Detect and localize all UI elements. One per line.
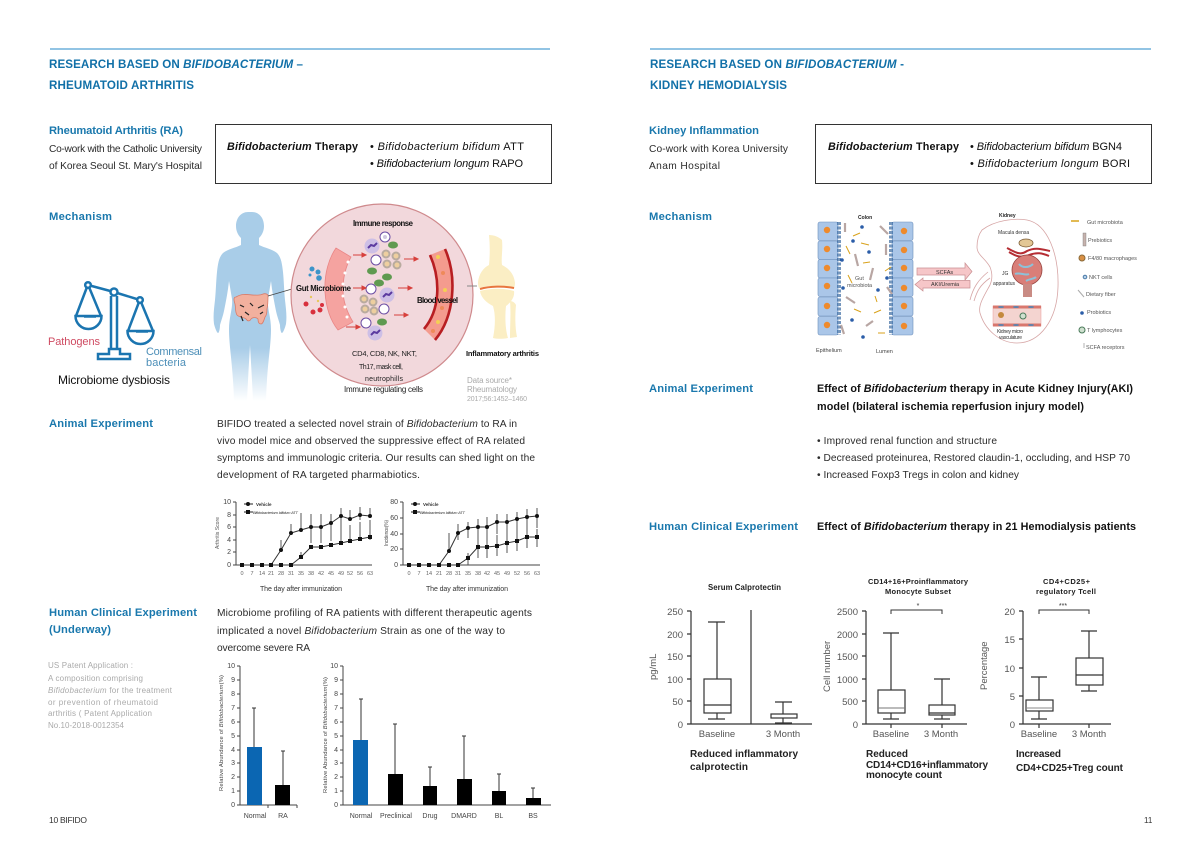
bar chart: therapeutic agents: 3 <box>334 760 338 767</box>
text block: RA collaboration: of Korea Seoul St. Mary's Hospital <box>49 161 202 172</box>
bar chart: therapeutic agents: 9 <box>334 677 338 684</box>
bar chart: therapeutic agents: 0 <box>334 802 338 809</box>
label: inflammatory arthritis: Inflammatory arthritis <box>466 349 539 358</box>
heading: human clinical experiment underway: Human Clinical Experiment <box>49 607 197 619</box>
box plot: monocyte subset: 3 Month <box>924 729 958 740</box>
note: patent application: arthritis ( Patent Application <box>48 709 152 718</box>
text block: AKI effect heading: model (bilateral ischemia reperfusion injury model) <box>817 401 1084 413</box>
line chart: incidence: 21 <box>436 571 442 577</box>
line chart: incidence: The day after immunization <box>426 586 508 593</box>
box plot: serum calprotectin: 250 <box>667 607 683 618</box>
diagram: kidney: vasculature <box>999 335 1022 341</box>
bar chart: therapeutic agents: BS <box>528 813 538 820</box>
box plot: monocyte subset: 2500 <box>837 607 858 618</box>
legend: kidney diagram: Gut microbiota <box>1087 220 1124 226</box>
red arrows <box>346 253 418 329</box>
label: reduced calprotectin: calprotectin <box>690 762 748 773</box>
label: pathogens: Pathogens <box>48 336 100 348</box>
bar chart: therapeutic agents <box>323 663 551 820</box>
text block: animal experiment description: development of RA targeted pharmabiotics. <box>217 470 420 481</box>
box plot: regulatory T cell: Percentage <box>979 641 990 690</box>
legend: kidney diagram: NKT cells <box>1089 275 1113 281</box>
box plot: regulatory T cell: 15 <box>1004 635 1015 646</box>
bar chart: normal vs RA: 7 <box>231 705 235 712</box>
panel: kidney hemodialysis page <box>648 49 1153 825</box>
heading: rheumatoid arthritis <box>49 58 304 92</box>
line chart: incidence: 52 <box>514 571 520 577</box>
bar chart: normal vs RA: Normal <box>244 813 267 820</box>
line chart: arthritis score: 56 <box>357 571 363 577</box>
bar chart: normal vs RA: 10 <box>227 663 235 670</box>
immune cells <box>360 232 400 340</box>
list: animal results: • Increased Foxp3 Tregs in colon and kidney <box>817 470 1020 481</box>
note: patent application: or prevention of rheumatoid <box>48 698 158 707</box>
note: data source <box>467 376 527 403</box>
box plot: monocyte subset: * <box>917 603 920 610</box>
heading: rheumatoid arthritis: RESEARCH BASED ON BIFIDOBACTERIUM – <box>49 58 304 71</box>
illustration: gut immune circle: neutrophills <box>365 376 404 383</box>
note: data source: Rheumatology <box>467 385 517 394</box>
box plot: monocyte subset: 500 <box>842 697 858 708</box>
line chart: arthritis score: The day after immunization <box>260 586 342 593</box>
bar chart: therapeutic agents: 2 <box>334 774 338 781</box>
line chart: incidence: 0 <box>394 562 398 569</box>
line chart: incidence: 7 <box>417 571 421 577</box>
label: commensal bacteria: bacteria <box>146 357 187 369</box>
line chart: incidence: 20 <box>390 546 398 553</box>
box plot: serum calprotectin: 50 <box>672 697 683 708</box>
label: reduced monocyte: CD14+CD16+inflammatory <box>866 760 988 771</box>
bar chart: therapeutic agents: BL <box>495 813 503 820</box>
note: patent application: US Patent Application : <box>48 661 133 670</box>
line chart: incidence: 63 <box>534 571 540 577</box>
label: reduced monocyte: Reduced <box>866 749 908 760</box>
legend: kidney diagram: Probiotics <box>1087 310 1111 316</box>
box plot: monocyte subset: 1500 <box>837 652 858 663</box>
line chart: arthritis score: 45 <box>328 571 334 577</box>
heading: mechanism: Mechanism <box>649 211 712 223</box>
line chart: incidence: 28 <box>446 571 452 577</box>
box plot: serum calprotectin <box>648 583 812 740</box>
box plot: monocyte subset: CD14+16+Proinflammatory <box>868 577 969 586</box>
text block: AKI effect heading: Effect of Bifidobacterium therapy in Acute Kidney Injury(AKI) <box>817 383 1133 395</box>
diagram: colon: Gut <box>855 276 864 282</box>
box plot: regulatory T cell: *** <box>1059 603 1067 610</box>
panel: rheumatoid arthritis page <box>48 49 552 825</box>
bar chart: therapeutic agents: 10 <box>330 663 338 670</box>
arrow: SCFAs: SCFAs <box>936 270 953 276</box>
text block: animal experiment description: BIFIDO treated a selected novel strain of Bifidobacterium to RA in <box>217 419 517 430</box>
line chart: arthritis score: 4 <box>227 537 231 544</box>
text block: hemodialysis effect heading: Effect of Bifidobacterium therapy in 21 Hemodialysis patients <box>817 521 1136 533</box>
text block: animal experiment description: vivo model mice and observed the suppressive effect of RA related <box>217 436 525 447</box>
bar chart: normal vs RA: 8 <box>231 691 235 698</box>
box plot: regulatory T cell: 5 <box>1010 692 1015 703</box>
box plot: serum calprotectin: Serum Calprotectin <box>708 583 781 592</box>
box plot: monocyte subset: Cell number <box>822 641 833 692</box>
blood vessel <box>424 249 452 340</box>
illustration: inflamed knee joint <box>467 235 517 339</box>
heading: kidney hemodialysis <box>650 58 904 92</box>
icon: balance scale <box>76 282 154 359</box>
line chart: arthritis score: 38 <box>308 571 314 577</box>
heading: kidney hemodialysis: RESEARCH BASED ON BIFIDOBACTERIUM - <box>650 58 904 71</box>
arrow: AKI/uremia <box>915 278 970 291</box>
box plot: monocyte subset: Baseline <box>873 729 909 740</box>
diagram: kidney: Kidney micro <box>997 329 1023 335</box>
diagram: kidney: Kidney <box>999 213 1016 219</box>
box plot: regulatory T cell: 3 Month <box>1072 729 1106 740</box>
label: reduced calprotectin: Reduced inflammatory <box>690 749 798 760</box>
diagram: kidney: JG <box>1002 271 1008 277</box>
text block: AKI effect heading <box>817 383 1133 413</box>
bar chart: normal vs RA: 3 <box>231 760 235 767</box>
line chart: arthritis score: Bifidobacterium bifidum ATT <box>253 510 299 515</box>
diagram: kidney <box>970 213 1058 343</box>
bar chart: normal vs RA: 9 <box>231 677 235 684</box>
callout: kidney therapy strains: • Bifidobacterium bifidum BGN4 <box>970 141 1122 153</box>
bar chart: therapeutic agents: Normal <box>350 813 373 820</box>
illustration: gut immune circle: Immune response <box>353 219 414 228</box>
note: data source: Data source* <box>467 376 512 385</box>
heading: rheumatoid arthritis: RHEUMATOID ARTHRITIS <box>49 79 194 92</box>
text block: kidney collaboration <box>649 125 789 172</box>
box plot: regulatory T cell: 20 <box>1004 607 1015 618</box>
heading: kidney hemodialysis: KIDNEY HEMODIALYSIS <box>650 79 787 92</box>
box plot: regulatory T cell: regulatory Tcell <box>1036 587 1096 596</box>
illustration: gut immune circle <box>291 204 473 386</box>
text block: RA collaboration <box>49 125 203 172</box>
diagram: kidney: Macula densa <box>998 230 1029 236</box>
line chart: arthritis score: 35 <box>298 571 304 577</box>
line chart: incidence: 40 <box>390 531 398 538</box>
illustration: gut immune circle: Blood vessel <box>417 296 458 305</box>
note: patent application: Bifidobacterium for the treatment <box>48 686 173 695</box>
bar chart: normal vs RA: 2 <box>231 774 235 781</box>
label: commensal bacteria: Commensal <box>146 346 202 358</box>
box plot: regulatory T cell: CD4+CD25+ <box>1043 577 1091 586</box>
line chart: arthritis score <box>215 499 373 593</box>
bar chart: therapeutic agents: 6 <box>334 719 338 726</box>
line chart: arthritis score: 52 <box>347 571 353 577</box>
page number: 10 BIFIDO: 10 BIFIDO <box>49 815 87 825</box>
text block: animal experiment description <box>217 419 535 481</box>
callout: RA therapy strains: Bifidobacterium Therapy <box>227 141 358 153</box>
text block: animal experiment description: symptoms and immunologic criteria. Our results can shed light on the <box>217 453 535 464</box>
box plot: regulatory T cell: 0 <box>1010 720 1015 731</box>
box plot: serum calprotectin: 150 <box>667 652 683 663</box>
line chart: arthritis score: 2 <box>227 549 231 556</box>
box plot: monocyte subset: Monocyte Subset <box>885 587 952 596</box>
diagram: kidney: apparatus <box>993 281 1016 287</box>
label: immune regulating cells: Immune regulating cells <box>344 385 423 394</box>
box plot: serum calprotectin: pg/mL <box>648 654 659 680</box>
heading: mechanism: Mechanism <box>49 211 112 223</box>
text block: RA collaboration: Rheumatoid Arthritis (RA) <box>49 125 183 137</box>
box plot: monocyte subset: 1000 <box>837 675 858 686</box>
callout: RA therapy strains: • Bifidobacterium bifidum ATT <box>370 141 524 153</box>
heading: human clinical experiment underway <box>49 607 197 636</box>
label: increased treg: CD4+CD25+Treg count <box>1016 763 1124 774</box>
text block: RA collaboration: Co-work with the Catholic University <box>49 144 203 155</box>
line chart: arthritis score: 21 <box>268 571 274 577</box>
line chart: incidence: 31 <box>455 571 461 577</box>
microbes <box>308 266 322 281</box>
label: reduced monocyte: monocyte count <box>866 770 943 781</box>
box plot: monocyte subset <box>822 577 969 740</box>
line chart: arthritis score: 6 <box>227 524 231 531</box>
note: data source: 2017;56:1452–1460 <box>467 396 527 403</box>
note: patent application: A composition comprising <box>48 674 143 683</box>
line chart: arthritis score: Vehicle <box>256 502 272 507</box>
bar chart: normal vs RA <box>219 663 297 820</box>
callout: kidney therapy strains: • Bifidobacterium longum BORI <box>970 158 1130 170</box>
callout: RA therapy strains <box>216 124 552 184</box>
page number: 11: 11 <box>1144 816 1153 825</box>
line chart: incidence: 38 <box>475 571 481 577</box>
heading: animal experiment: Animal Experiment <box>649 383 753 395</box>
label: microbiome dysbiosis: Microbiome dysbiosis <box>58 373 170 387</box>
box plot: regulatory T cell <box>979 577 1111 740</box>
bar chart: normal vs RA: 4 <box>231 747 235 754</box>
box plot: regulatory T cell: 10 <box>1004 664 1015 675</box>
text block: human clinical description: Microbiome profiling of RA patients with different therapeutic agents <box>217 608 532 619</box>
bar chart: therapeutic agents: Preclinical <box>380 813 412 820</box>
box plot: serum calprotectin: 100 <box>667 675 683 686</box>
line chart: incidence <box>384 499 540 593</box>
text block: human clinical description <box>217 608 532 654</box>
line chart: arthritis score: 14 <box>259 571 265 577</box>
line chart: arthritis score: 28 <box>278 571 284 577</box>
bar chart: therapeutic agents: 8 <box>334 691 338 698</box>
legend: kidney diagram: F4/80 macrophages <box>1088 256 1137 262</box>
diagram: colon <box>818 215 913 339</box>
line chart: incidence: 60 <box>390 515 398 522</box>
bar chart: normal vs RA: 0 <box>231 802 235 809</box>
note: patent application: No.10-2018-0012354 <box>48 721 125 730</box>
box plot: monocyte subset: 2000 <box>837 630 858 641</box>
illustration: gut immune circle: CD4, CD8, NK, NKT, <box>352 349 417 358</box>
legend: kidney diagram: SCFA receptors <box>1086 345 1125 351</box>
heading: human clinical experiment underway: (Underway) <box>49 624 111 636</box>
legend: kidney diagram: Dietary fiber <box>1086 292 1116 298</box>
line chart: arthritis score: 63 <box>367 571 373 577</box>
line chart: arthritis score: 10 <box>223 499 231 506</box>
label: reduced monocyte <box>866 749 988 781</box>
bar chart: therapeutic agents: 4 <box>334 747 338 754</box>
line chart: arthritis score: 0 <box>227 562 231 569</box>
line chart: incidence: 80 <box>390 499 398 506</box>
box plot: serum calprotectin: 3 Month <box>766 729 800 740</box>
line chart: arthritis score: 49 <box>338 571 344 577</box>
gut epithelium <box>325 248 353 330</box>
box plot: serum calprotectin: Baseline <box>699 729 735 740</box>
legend: kidney diagram <box>816 220 1137 355</box>
box plot: serum calprotectin: 200 <box>667 630 683 641</box>
legend: kidney diagram: T lymphocytes <box>1087 328 1123 334</box>
text block: kidney collaboration: Anam Hospital <box>649 161 720 172</box>
arrow: AKI/uremia: AKI/Uremia <box>931 282 960 288</box>
text block: kidney collaboration: Co-work with Korea University <box>649 144 789 155</box>
legend: kidney diagram: Epithelium <box>816 348 842 354</box>
bar chart: therapeutic agents: 7 <box>334 705 338 712</box>
bar chart: normal vs RA: RA <box>278 813 288 820</box>
note: patent application <box>48 661 173 730</box>
label: reduced calprotectin <box>690 749 798 773</box>
label: commensal bacteria <box>146 346 202 369</box>
line chart: incidence: Vehicle <box>423 502 439 507</box>
line chart: arthritis score: 0 <box>240 571 244 577</box>
line chart: arthritis score: Arthritis Score <box>215 517 221 549</box>
heading: animal experiment: Animal Experiment <box>49 418 153 430</box>
text block: kidney collaboration: Kidney Inflammation <box>649 125 759 137</box>
bar chart: normal vs RA: 5 <box>231 733 235 740</box>
diagram: colon: microbiota <box>847 283 873 289</box>
line chart: incidence: Bifidobacterium bifidum ATT <box>420 510 466 515</box>
bar chart: therapeutic agents: DMARD <box>451 813 477 820</box>
legend: kidney diagram: Lumen <box>876 349 893 355</box>
bar chart: therapeutic agents: 5 <box>334 733 338 740</box>
line chart: arthritis score: 42 <box>318 571 324 577</box>
illustration: gut immune circle: Gut Microbiome <box>296 284 352 293</box>
callout: kidney therapy strains <box>816 124 1152 184</box>
label: increased treg <box>1016 749 1124 774</box>
line chart: incidence: 14 <box>426 571 432 577</box>
bar chart: normal vs RA: 6 <box>231 719 235 726</box>
line chart: incidence: 0 <box>407 571 411 577</box>
bar chart: normal vs RA: Relative Abundance of Bifidobacterium(%) <box>219 675 225 791</box>
bar chart: therapeutic agents: Relative Abundance of Bifidobacterium(%) <box>323 677 329 793</box>
line chart: arthritis score: 8 <box>227 512 231 519</box>
bar chart: therapeutic agents: Drug <box>422 813 438 820</box>
illustration: gut immune circle: Th17, mask cell, <box>359 364 403 371</box>
line chart: incidence: 49 <box>504 571 510 577</box>
text block: human clinical description: implicated a novel Bifidobacterium Strain as one of the way to <box>217 626 505 637</box>
line chart: incidence: Incidence(%) <box>384 520 390 546</box>
text block: human clinical description: overcome severe RA <box>217 643 310 654</box>
arrow: SCFAs <box>917 263 972 280</box>
line chart: incidence: 45 <box>494 571 500 577</box>
legend: kidney diagram: Prebiotics <box>1088 238 1112 244</box>
list: animal results: • Improved renal function and structure <box>817 436 997 447</box>
line chart: arthritis score: 31 <box>288 571 294 577</box>
callout: kidney therapy strains: Bifidobacterium Therapy <box>828 141 959 153</box>
box plot: monocyte subset: 0 <box>853 720 858 731</box>
box plot: regulatory T cell: Baseline <box>1021 729 1057 740</box>
bar chart: normal vs RA: 1 <box>231 788 235 795</box>
bar chart: therapeutic agents: 1 <box>334 788 338 795</box>
heading: human clinical experiment: Human Clinical Experiment <box>649 521 798 533</box>
list: animal results <box>817 436 1130 481</box>
illustration: human body <box>214 212 286 401</box>
line chart: incidence: 42 <box>484 571 490 577</box>
list: animal results: • Decreased proteinurea, Restored claudin-1, occluding, and HSP 70 <box>817 453 1130 464</box>
box plot: serum calprotectin: 0 <box>678 720 683 731</box>
line chart: incidence: 56 <box>524 571 530 577</box>
line chart: incidence: 35 <box>465 571 471 577</box>
callout: RA therapy strains: • Bifidobacterium longum RAPO <box>370 158 523 170</box>
diagram: colon: Colon <box>858 215 872 221</box>
line chart: arthritis score: 7 <box>250 571 254 577</box>
illustration: intestines <box>234 294 268 324</box>
label: increased treg: Increased <box>1016 749 1061 760</box>
